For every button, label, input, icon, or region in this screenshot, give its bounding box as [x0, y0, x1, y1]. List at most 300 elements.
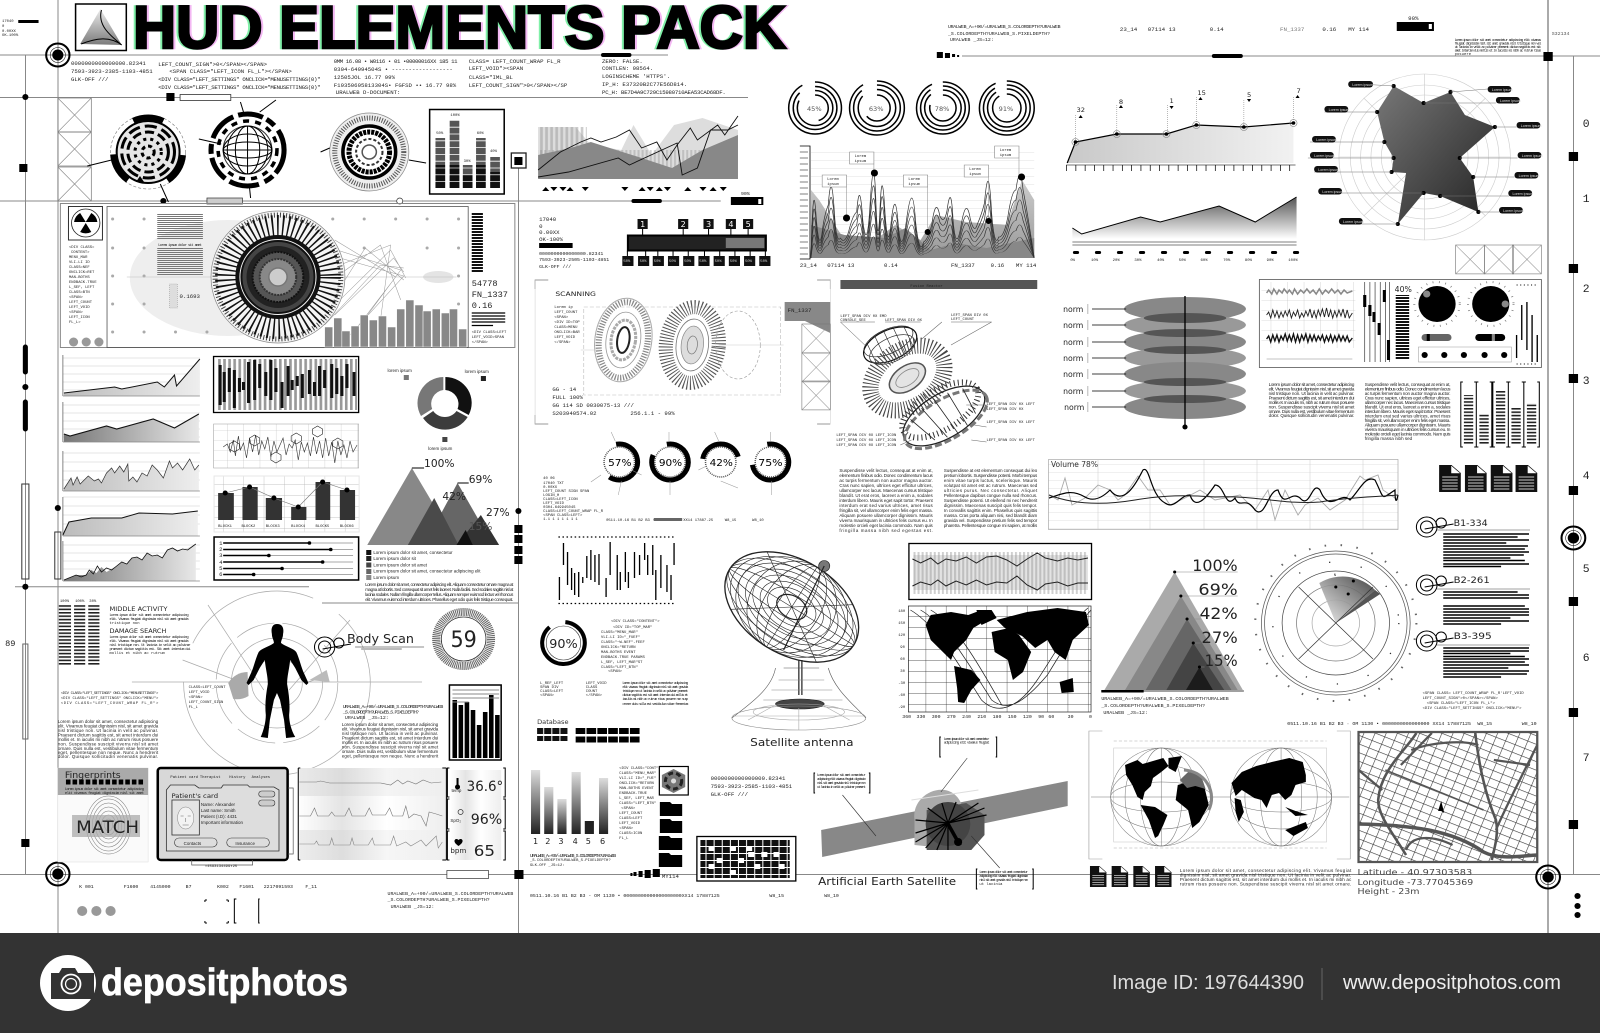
paragraph left: mollis et. In iaculis mi nibh ac rutrum risus posuere	[58, 737, 159, 742]
text columns: ac turpis fermentum non auctor magna auctor.	[839, 478, 933, 483]
monitor text columns: nisl tristique non. Ut lacinia in velit ac pulvinar.	[1269, 391, 1354, 396]
bottom tick text: 2217091593	[264, 884, 293, 890]
scanning panel	[535, 280, 830, 424]
code column: <DIV CLASS="CONT">	[619, 766, 661, 771]
header code text: 0MM 16.08 • W0116 • 01 •00000016XX 185 11	[334, 58, 458, 65]
area chart right: 30%	[1134, 259, 1142, 263]
scanning panel: 256.1.1 - 99%	[630, 410, 675, 417]
header code text: LEFT_COUNT_SIGN">0</SPAN></SPAN>	[158, 61, 268, 68]
numbered progress bar: 50%	[745, 260, 753, 264]
paragraph left: Lorem ipsum dolor sit amet, consectetur adipiscing	[58, 719, 159, 724]
code list: ONCLICK=RET	[69, 271, 95, 275]
code block: <SPAN>	[608, 669, 623, 674]
gradient bars: 6	[600, 837, 605, 846]
radar chart: Lorem ipsum	[1314, 154, 1335, 158]
bar chart blocks: BLOCK6	[340, 525, 354, 529]
side readout: </SPAN>	[472, 340, 489, 345]
blob bar chart: 50%	[436, 132, 444, 136]
radar chart: Lorem ipsum	[1503, 209, 1524, 213]
sensor lists: <SPAN CLASS="LEFT_ICON FL_L">	[1427, 701, 1496, 706]
world map: 270	[947, 714, 956, 720]
peak chart: Lorem	[827, 178, 839, 182]
left column content	[2, 4, 568, 923]
coordinates: Longitude -73.77045369	[1358, 877, 1473, 887]
patient card: History	[229, 775, 246, 780]
level bars left: 100%	[60, 600, 70, 604]
tiny code centre: <SPAN CLASS=LEFT>	[543, 513, 583, 518]
code block: ornare duis nulla est vestibulum vitae fermentum	[622, 702, 689, 707]
icon: heart	[454, 839, 463, 846]
bar chart blocks: BLOCK2	[241, 525, 256, 529]
paragraph left: nisl tristique non. Ut lacinia in velit ac pulvinar.	[58, 728, 158, 733]
header code text: 0000000000000000.82341	[71, 60, 146, 67]
code block: VLI-LI ID="_FUEF"	[601, 635, 640, 640]
side readout: <DIV CLASS=LEFT	[472, 330, 507, 335]
engine labels	[836, 314, 1036, 448]
monitor text columns: Cras nunc sapien, ultrices eget efficitur ultrices,	[1365, 396, 1450, 400]
panel: reactor	[60, 204, 515, 348]
fingerprints panel: Lorem ipsum dolor sit amet consectetur adipiscing	[65, 787, 144, 792]
radar chart: Lorem ipsum	[1343, 220, 1364, 224]
frame markers right: 5	[1583, 564, 1590, 576]
radar chart: Lorem ipsum	[1352, 83, 1373, 87]
lower scale text: 0511.10.16 B1 B2 B3 - OM 1130 • 00000000000000000000XX14 17887125	[530, 893, 720, 899]
frame markers right: 3	[1583, 376, 1590, 388]
value tag	[169, 284, 201, 308]
text columns: Pellentesque dapibus congue nulla sed rhoncus.	[944, 493, 1037, 498]
scanning panel: LEFT_COUNT	[554, 311, 578, 315]
side readout: 0.16	[472, 301, 492, 311]
barcode panel	[214, 356, 359, 412]
code list: ENDBACK.TRUE	[69, 281, 97, 285]
globes panel	[1089, 721, 1537, 887]
frame markers right: S32134	[1552, 31, 1570, 37]
vitals: 96%	[471, 811, 502, 828]
id text	[539, 216, 609, 270]
frame markers left: 0	[2, 25, 5, 29]
image id: Image ID: 197644390	[1112, 972, 1304, 994]
world map: 0	[1089, 714, 1092, 720]
slider panel: 2	[219, 546, 223, 553]
bottom tick text	[77, 870, 513, 923]
slider panel: 5	[219, 565, 223, 572]
mountain chart: 100%	[424, 458, 454, 470]
paragraph right of body: elit. Vivamus feugiat dignissim nisl, sit amet gravida	[342, 727, 439, 731]
bottom tick text: URALWEB_A=+90/=URALWEB_S.COLORDEPTH?URALWEB	[388, 891, 513, 897]
engine labels: LEFT_SPAN DIV 0X LEFT	[987, 403, 1036, 407]
small code texts	[61, 686, 443, 721]
header code text: <SPAN CLASS="LEFT_ICON FL_L"></SPAN>	[169, 68, 292, 75]
header code text: GLK-OFF ///	[71, 76, 109, 83]
cross boxes right	[1456, 245, 1541, 274]
stacked ellipses: norm	[1063, 305, 1083, 314]
radar scope	[1255, 545, 1416, 701]
vitals: 36.6°	[467, 778, 503, 795]
patient card: Patient card	[170, 775, 198, 780]
small code texts: <DIV CLASS="LEFT_SETTINGS" ONCLICK="MENUSETTINGS">	[61, 691, 159, 696]
gauges: 57%	[608, 458, 631, 469]
world map: 240	[962, 714, 971, 720]
code column: <SPAN>	[619, 826, 634, 831]
blob bar chart: 40%	[490, 150, 498, 154]
code list: LEFT_ICON	[69, 316, 90, 320]
dark band: Fusion Reactor	[910, 284, 943, 289]
text columns: blandit. Ut erat eros, laoreet a enim a, sodales	[839, 493, 934, 498]
text columns: ultricies purus. Nec consectetur. Aliquet	[944, 488, 1038, 493]
line chart top right	[1066, 87, 1301, 168]
code list: LEFT_COUNT	[69, 301, 93, 305]
middle activity text: DAMAGE SEARCH	[110, 628, 166, 635]
icon: radiation	[68, 206, 102, 240]
header code middle	[601, 24, 1061, 96]
brand name: depositphotos	[101, 962, 348, 1004]
middle activity text: Lorem ipsum dolor sit amet consectetur adipiscing	[110, 635, 189, 640]
blob bar chart	[430, 110, 504, 194]
globes panel: rutrum risus posuere non. Suspendisse suscipit viverra nisl sit amet ornare.	[1180, 882, 1351, 886]
monitor text columns: ullamcorper nec lacus. Maecenas cursus tristique	[1365, 400, 1451, 405]
satellite callouts: adipiscing elit vivamus feugiat	[944, 741, 990, 745]
sensor lists: <SPAN CLASS= LEFT_COUNT_WRAP FL_R'LEFT_VOID	[1423, 691, 1524, 696]
code column: CLASS="MENU_MAR"	[619, 771, 656, 776]
code list: FL_L>	[69, 320, 81, 325]
stack triangle chart: URALWEB_A=+90/=URALWEB_S.COLORDEPTH?URALWEB	[1101, 696, 1229, 702]
satellite callouts	[814, 737, 1033, 889]
scanning panel: GG 114 SD 0030075-13 ///	[552, 402, 635, 409]
gauge 59: 59	[450, 627, 477, 653]
stack triangle chart: _S.COLORDEPTH?URALWEB_S.PIXELDEPTH?	[1100, 703, 1205, 709]
world map: 30	[1068, 714, 1074, 720]
coordinates: Height - 23m	[1358, 886, 1420, 896]
header code middle: ZERO: FALSE.	[602, 58, 643, 65]
mountain chart: Lorem ipsum	[373, 575, 399, 580]
tiny code centre: CLASS=LEFT_ICON	[543, 498, 578, 502]
header code text: 12505JOL 16.77 99%	[334, 74, 396, 81]
antenna label: Satellite antenna	[750, 736, 854, 749]
stacked ellipses	[1063, 296, 1246, 430]
small code texts: <DIV CLASS="LEFT_COUNT_WRAP FL_R">	[61, 701, 159, 706]
gauges: 75%	[758, 458, 783, 469]
text columns: Suspendisse potenti. Ut eleifend mi nec hendrerit	[944, 498, 1038, 503]
engine labels: LEFT_SPAN DIV 0X	[951, 314, 989, 318]
small code texts: <SPAN>	[189, 695, 203, 700]
engine labels: LEFT_SPAN DIV 0X LEFT	[987, 421, 1036, 425]
world map: 150	[1008, 714, 1017, 720]
code block: CLASS="MENU_MAR"	[601, 630, 638, 635]
code block: </SPAN>	[586, 693, 603, 698]
tiny code centre: LEFT_COUNT SIGN SPAN	[543, 490, 589, 494]
frame markers left: OK-100%	[2, 34, 19, 38]
paragraph left: ornare. Duis nulla est, vestibulum vitae fermentum	[58, 746, 159, 751]
header code right: 0.14	[1210, 26, 1224, 33]
peak chart: 0.14	[884, 262, 898, 269]
patient card: Patient (I.D): 4431	[201, 814, 238, 819]
satellite callouts: adipiscing elit vivamus feugiat dignissim	[979, 874, 1029, 879]
stack triangle chart: 42%	[1199, 604, 1238, 623]
fm tag: FN_1337	[788, 307, 811, 314]
frame markers left	[2, 20, 523, 886]
bottom tick text: F1600	[124, 884, 138, 890]
bottom tick text: F_11	[305, 884, 317, 890]
blob bar chart: 100%	[450, 114, 460, 118]
candlestick	[558, 537, 674, 604]
code block: Lorem ipsum dolor sit amet consectetur adipiscing	[622, 681, 688, 686]
header code text: 0304-64994504S • ------------------	[334, 66, 453, 73]
side readout: 54778	[472, 279, 498, 289]
world map: -30	[898, 682, 906, 686]
world map: 30	[900, 670, 906, 674]
area chart right: 20%	[1113, 259, 1120, 263]
radar chart	[1308, 74, 1543, 240]
header code text: LEFT_COUNT_SIGN">0</SPAN></SP	[469, 82, 568, 89]
icon: docs row	[1090, 866, 1172, 887]
icon: folders	[659, 802, 682, 867]
bars	[325, 300, 467, 347]
world map: 180	[993, 714, 1001, 720]
area chart right: 90%	[1267, 259, 1274, 263]
area chart right: 80%	[1245, 259, 1253, 263]
patient card: Contacts	[184, 841, 202, 846]
gauge 90	[540, 620, 587, 666]
icon: camera logo	[40, 955, 96, 1011]
patient card: Important information	[201, 820, 243, 825]
satellite callouts: Lorem ipsum dolor sit amet consectetur	[979, 870, 1028, 875]
radar chart: Lorem ipsum	[1500, 99, 1521, 103]
footer	[0, 933, 1600, 1033]
line chart top right: 32	[1077, 106, 1085, 114]
code list: CONTENT>	[71, 250, 90, 255]
globes panel: 0511.10.16 B1 B2 B3 · OM 1130 • 0000000000000000 XX14 17887125	[1287, 721, 1471, 727]
text columns: ullamcorper nec lacus. Maecenas cursus tristique	[839, 488, 933, 493]
radar chart: Lorem ipsum	[1522, 154, 1543, 158]
middle activity text: praesent dictum sagittis est. Sit amet interdum dui	[110, 647, 191, 652]
satellite	[814, 737, 1068, 889]
peak chart: 0.16	[991, 262, 1005, 269]
header code text: LEFT_VOID"><SPAN	[469, 65, 523, 72]
wave box	[909, 544, 1092, 600]
volume chart: Volume 78%	[1051, 460, 1098, 469]
satellite callouts: nisl sit amet gravida nisl tristique non	[979, 878, 1028, 883]
sensor lists: <DIV CLASS="LEFT_SETTINGS" ONCLICK="MENU">	[1423, 706, 1522, 711]
side readout: LEFT_VOID>SPAN	[472, 335, 504, 340]
text columns: gravida vel. Suspendisse pretium felis sed tempor	[944, 518, 1038, 523]
header code middle: IP_H: E37320B2C77E56D814.	[602, 81, 687, 88]
right globe land	[1231, 758, 1308, 836]
monitor text columns: dolor. Quisque sollicitudin venenatis pulvinar.	[1269, 413, 1354, 418]
radar chart: Lorem ipsum	[1322, 190, 1343, 194]
peak chart: ipsum	[908, 182, 921, 187]
stacked ellipses: norm	[1064, 403, 1084, 412]
radar chart: Lorem ipsum	[1329, 108, 1349, 112]
world map: 330	[917, 714, 925, 720]
mountain chart: Lorem ipsum dolor sit amet	[373, 563, 428, 567]
small code texts: <DIV CLASS="LEFT_SETTINGS" ONCLICK="MENU">	[61, 696, 159, 701]
patient card: Analyses	[252, 775, 270, 780]
text block	[157, 214, 203, 276]
line chart top right: 5	[1247, 91, 1251, 99]
tiny code centre: LOGIN_H	[543, 494, 559, 498]
peak chart: Lorem	[1000, 149, 1012, 153]
bottom tick text: B7	[186, 884, 192, 890]
lower scale text: W8_10	[824, 893, 839, 899]
monitor panel: 40%	[1395, 285, 1412, 294]
rings: 78%	[935, 105, 949, 113]
world map: 90	[900, 646, 906, 650]
rings	[789, 81, 1034, 135]
world map	[898, 606, 1092, 720]
world map: -90	[898, 706, 906, 710]
scanning panel: GG - 14	[552, 386, 577, 393]
id text lower: GLK-OFF ///	[711, 791, 749, 798]
tiny code centre: 0511.10.16 B1 B2 B3 · OM 1130	[606, 519, 674, 523]
code block: ENDBACK.TRUE PARAMS	[601, 656, 646, 660]
code list: LEFT_VOID	[69, 306, 90, 310]
numbered progress bar: 50%	[715, 260, 722, 264]
satellite callouts: nisl sit amet gravida nisl tristique non	[817, 781, 866, 786]
header code middle: LOGINSCHEME 'HTTPS'.	[602, 73, 670, 80]
sensor lists: B3-395	[1454, 632, 1492, 642]
hud circle 1	[87, 107, 194, 202]
header code text: CLASS="IML_BL	[469, 74, 514, 81]
lower scale text: GLK-OFF _JS=12:	[530, 864, 565, 868]
text columns: pharetra. Pellentesque congue mi sapien, at mollis	[944, 523, 1038, 528]
header code text: URALWEB D-DOCUMENT:	[336, 89, 400, 96]
column bars box	[449, 685, 501, 760]
monitor text columns: Suspendisse velit lectus, consequat at enim at,	[1365, 382, 1450, 387]
frame markers right	[1536, 31, 1590, 918]
engine labels: LEFT_SPAN DIV 0X LEFT_ICON	[836, 444, 896, 448]
paragraph right of body: Lorem ipsum dolor sit amet, consectetur adipiscing	[342, 722, 439, 727]
numbered progress bar	[622, 219, 770, 266]
peak chart: Lorem	[908, 178, 921, 182]
code block: iaculis mi nibh ac rutrum risus posuere non susp	[622, 697, 689, 702]
frame markers right: 2	[1583, 284, 1590, 296]
numbered progress bar: 4	[728, 220, 733, 229]
satellite: Artificial Earth Satellite	[818, 876, 956, 888]
tiny code centre: 1.1 1 1 1 1 1 1	[543, 518, 578, 522]
id text lower: 0000000000000000.82341	[711, 775, 786, 782]
target square	[511, 153, 526, 168]
scanning panel: LEFT_VOID	[554, 336, 576, 340]
numbered progress bar: 50%	[760, 260, 768, 264]
text columns: Cras nunc sapien, ultrices eget efficitur ultrices,	[839, 483, 933, 488]
tiny code centre: CLASS=LEFT_COUNT_WRAP FL_R	[543, 510, 604, 514]
code block: CLASS	[586, 686, 598, 690]
sensor lists	[1416, 517, 1530, 711]
monitor text columns: Aliquam posuere ullamcorper dignissim. Mauris	[1365, 423, 1451, 427]
code column: CLASS=ICON	[619, 832, 642, 836]
world map: -60	[898, 694, 906, 698]
sensor lists: B2-261	[1454, 576, 1490, 586]
peak chart: ipsum	[855, 159, 867, 164]
scanning panel: <SPAN>	[554, 315, 569, 320]
monitor text columns: Praesent dictum sagittis est, sit amet interdum dui	[1269, 396, 1354, 400]
frame markers right: 4	[1583, 471, 1590, 483]
text columns: fringilla massa nibh sed egestas est.	[839, 528, 933, 533]
world map: 120	[898, 634, 906, 638]
bottom tick text: _S.COLORDEPTH?URALWEB_S.PIXELDEPTH?	[387, 897, 490, 903]
vitals: 65	[474, 842, 495, 860]
peak chart: 23_14	[800, 262, 817, 269]
header code right: posuere	[1455, 53, 1472, 57]
id text: 0000000000000000.82341	[539, 251, 603, 257]
ecg strips	[297, 768, 446, 860]
line chart top right: 1	[1169, 97, 1174, 105]
monitor text columns: blandit. Ut erat eros, laoreet a enim a, sodales	[1365, 405, 1451, 409]
code block: ONCLICK="RETURN	[601, 645, 636, 650]
slider panel: 3	[219, 552, 223, 559]
gauges: 42%	[710, 458, 733, 469]
coordinates	[1358, 867, 1473, 896]
monitor text columns: non. Suspendisse suscipit viverra nisl sit amet	[1269, 405, 1355, 409]
connectors row	[160, 198, 403, 204]
hud circle 3	[321, 113, 426, 191]
globes panel: Praesent dictum sagittis est, sit amet interdum dui mollis et. In iaculis mi nibh ac	[1180, 877, 1352, 882]
paragraph right of body: nisl tristique non. Ut lacinia in velit ac pulvinar.	[342, 731, 438, 736]
paragraph right of body: ornare. Duis nulla est, vestibulum vitae fermentum	[342, 749, 439, 754]
donut chart: lorem ipsum	[465, 369, 489, 374]
monitor text columns: Lorem ipsum dolor sit amet, consectetur adipiscing	[1269, 382, 1355, 387]
stack triangle chart: 27%	[1202, 628, 1238, 647]
globes panel: Lorem ipsum dolor sit amet, consectetur adipiscing elit. Vivamus feugiat	[1180, 868, 1352, 873]
monitor text columns: interdum libero. Mauris eget sapit tortor. Praesent	[1365, 409, 1451, 414]
area chart right	[1070, 197, 1298, 263]
code list: L_SEF, LEFT	[69, 286, 95, 290]
code column: L_SEF, LEFT_MAR	[619, 797, 655, 801]
code list: <DIV CLASS=	[69, 245, 95, 250]
header code text: F19350695813304S• FGFSD •• 16.77 98%	[334, 82, 457, 89]
patient card: Therapist	[200, 775, 221, 780]
donut chart: lorem ipsum	[428, 446, 453, 451]
tiny code centre: XX14 17887.25	[683, 519, 714, 523]
monitor text columns: ornare. Duis nulla est, vestibulum vitae fermentum	[1269, 409, 1355, 414]
monitor text columns: mollis et. In iaculis mi, nibh ac rutrum risus posuere	[1269, 400, 1355, 405]
numbered progress bar: 50%	[640, 260, 647, 264]
lower scale text: W8_15	[769, 893, 784, 899]
radar scope: N	[1334, 574, 1337, 578]
gauge 59	[436, 612, 491, 666]
vitals: SpO₂	[450, 818, 461, 823]
stack triangle chart: URALWEB _JS=12:	[1103, 710, 1148, 716]
mountain chart	[365, 458, 514, 602]
code block: COUNT	[586, 690, 598, 694]
stack triangle chart	[1100, 556, 1244, 716]
id text: 0.00XX	[539, 229, 560, 236]
code block: L_REF_LEFT	[540, 682, 564, 686]
rings: 63%	[869, 105, 883, 113]
text columns: interdum erat sed varius ultrices, amet risus	[839, 503, 934, 508]
peak chart: 07114 13	[827, 262, 855, 269]
human silhouette	[247, 624, 308, 738]
text columns: volutpat sit amet est ac rutrum. Maecenas sed	[944, 483, 1038, 488]
lower scale text: MY114	[662, 873, 680, 880]
globes panel: dignissim nisl, sit amet gravida nisl tristique non. Ut lacinia in velit ac pulvinar.	[1180, 873, 1351, 877]
engine labels: LEFT_SPAN DIV 0X LEFT_ICON	[836, 439, 896, 443]
blob bar chart: 60%	[477, 132, 484, 136]
rings: 91%	[999, 105, 1013, 113]
middle column content	[510, 24, 1092, 899]
mountain chart: 15%	[469, 521, 492, 533]
stacked ellipses: norm	[1063, 338, 1083, 347]
small code texts: FL_L	[189, 706, 199, 710]
small code texts: URALWEB_A=+90/=URALWEB_S.COLORDEPTH?URALWEB	[343, 704, 443, 710]
mountain chart: 69%	[469, 474, 492, 486]
code block: <DIV ID="TOP_MAR"	[613, 625, 652, 630]
code list: <SPAN>	[69, 295, 84, 300]
engine labels: LEFT_SPAN DIV 0X	[885, 319, 923, 323]
label: body scan	[314, 631, 424, 657]
id text lower: 7593-3923-2585-1103-4851	[711, 783, 793, 790]
header code right: 07114 13	[1148, 26, 1176, 33]
